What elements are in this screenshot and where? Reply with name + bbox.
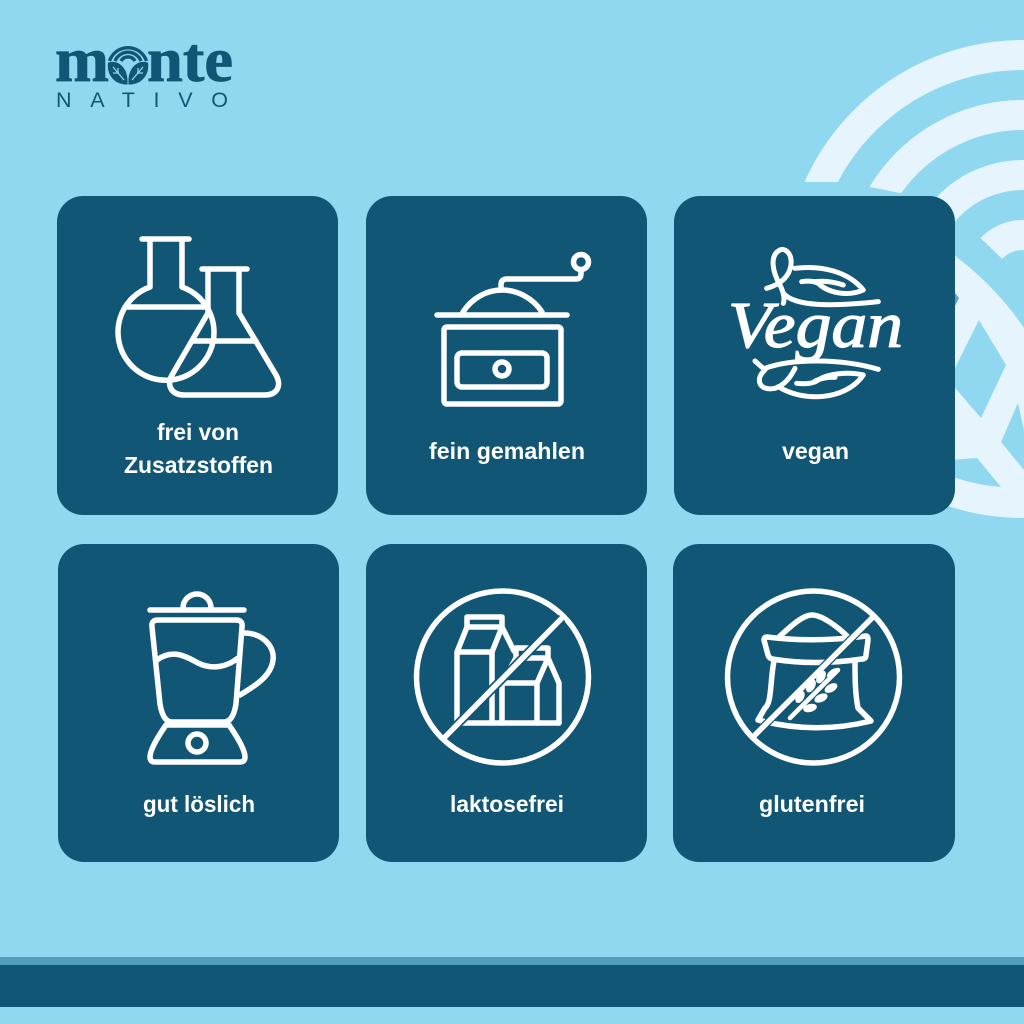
label: glutenfrei	[759, 791, 865, 817]
icon: flasks	[118, 239, 279, 395]
card: frei von Zusatzstoffen	[57, 196, 338, 515]
logo emblem	[108, 48, 148, 84]
label: laktosefrei	[450, 791, 564, 817]
logo wordmark monte: m	[55, 24, 109, 95]
logo wordmark nte: nte	[147, 24, 233, 95]
icon: no gluten sack	[728, 591, 900, 763]
icon: vegan lettering: Vegan	[728, 289, 903, 362]
label: Zusatzstoffen	[124, 452, 273, 478]
icon: vegan lettering	[728, 249, 903, 397]
logo	[55, 24, 233, 112]
wheat ear	[790, 666, 841, 718]
card: vegan	[674, 196, 955, 515]
logo wordmark nativo: NATIVO	[56, 88, 228, 112]
card: gut löslich	[58, 544, 339, 862]
icon: no milk cartons	[416, 591, 588, 763]
card: glutenfrei	[673, 544, 955, 862]
background emblem	[799, 55, 1024, 518]
bottom bar	[0, 957, 1024, 1007]
icon: blender	[150, 594, 273, 762]
label: frei von	[157, 419, 239, 445]
label: fein gemahlen	[429, 438, 585, 464]
label: gut löslich	[143, 791, 255, 817]
card: fein gemahlen	[366, 196, 647, 515]
card: laktosefrei	[366, 544, 647, 862]
icon: coffee grinder	[437, 254, 588, 404]
label: vegan	[782, 438, 849, 464]
